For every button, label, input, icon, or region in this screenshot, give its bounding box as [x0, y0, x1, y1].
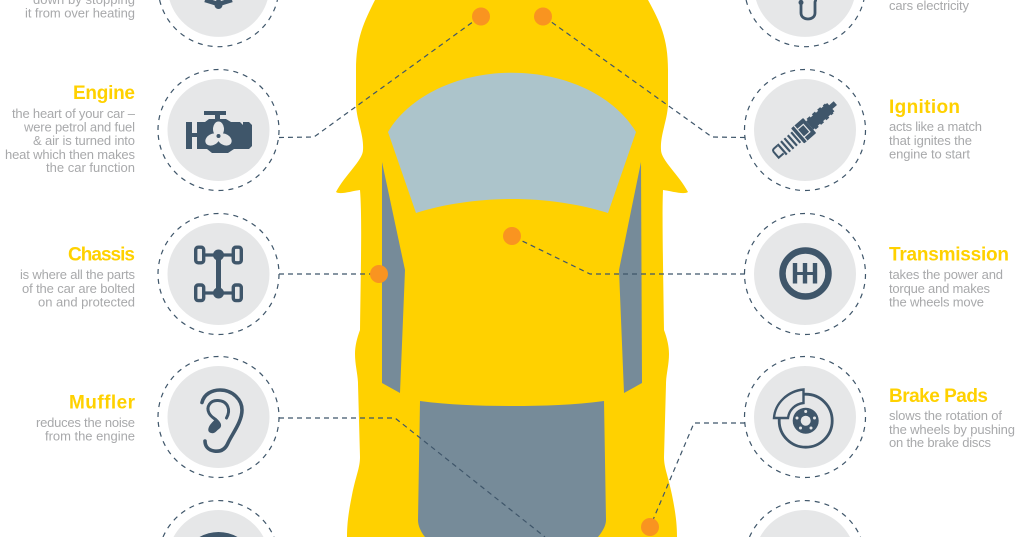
heading: Engine: Engine [73, 83, 135, 104]
panel: chassis [20, 214, 279, 334]
car body [336, 0, 688, 537]
panel: transmission [744, 214, 1009, 334]
text: muffler description: from the engine [45, 428, 135, 444]
icon: brake disc [774, 390, 832, 447]
text: engine description: the heart of your car – [12, 106, 136, 121]
panel: electricity (cropped) [746, 0, 970, 47]
text: engine description: were petrol and fuel [23, 120, 135, 134]
text: engine description [5, 106, 136, 175]
icon: dome [200, 532, 238, 537]
panel: muffler [36, 356, 279, 478]
connector lines [279, 16, 745, 537]
text: ignition description: acts like a match [889, 119, 982, 134]
rear window [418, 401, 606, 537]
text: ignition description: engine to start [889, 146, 970, 162]
icon: spark plug [769, 96, 842, 162]
text: engine description: the car function [46, 160, 135, 175]
heading: Muffler: Muffler [69, 393, 136, 414]
text: engine description: heat which then makes [5, 147, 136, 162]
text: brake pads description: on the brake discs [889, 435, 992, 450]
text: brake pads description: the wheels by pushing [889, 422, 1015, 437]
heading: Ignition: Ignition [889, 97, 960, 118]
icon: chassis [196, 247, 241, 301]
text: transmission description: torque and makes [889, 281, 990, 296]
left side window [382, 162, 405, 393]
heading: Chassis: Chassis [68, 245, 135, 266]
panel: engine [5, 70, 279, 190]
text: transmission description: takes the power and [889, 267, 1003, 282]
heading: Transmission: Transmission [889, 245, 1009, 266]
text: muffler description [36, 415, 135, 444]
text: chassis description: of the car are bolted [22, 281, 135, 296]
text: chassis description: on and protected [38, 294, 135, 310]
text: ignition description [889, 119, 982, 162]
text: chassis description: is where all the parts [20, 267, 136, 282]
connector dots [370, 8, 659, 536]
text: ignition description: that ignites the [889, 133, 972, 148]
right side window [619, 162, 642, 393]
windshield [388, 73, 636, 213]
car silhouette [336, 0, 688, 537]
panel: cropped lower left [163, 501, 274, 537]
panel: radiator (cropped): it from over heating [25, 6, 135, 20]
text: transmission description [889, 267, 1003, 310]
panel: ignition [744, 70, 982, 190]
icon: ear [202, 390, 242, 451]
panel: cropped lower right [750, 501, 860, 537]
icon: engine [186, 111, 252, 153]
text: chassis description [20, 267, 136, 310]
text: engine description: & air is turned into [33, 133, 135, 148]
text: muffler description: reduces the noise [36, 415, 135, 430]
text: brake pads description: slows the rotation of [889, 408, 1002, 423]
heading: Brake Pads: Brake Pads [889, 386, 988, 407]
panel: radiator (cropped) [25, 0, 277, 47]
text: transmission description: the wheels move [889, 294, 984, 310]
text: brake pads description [889, 408, 1015, 450]
panel: brake pads [744, 356, 1015, 478]
icon: gear shift [782, 250, 828, 296]
